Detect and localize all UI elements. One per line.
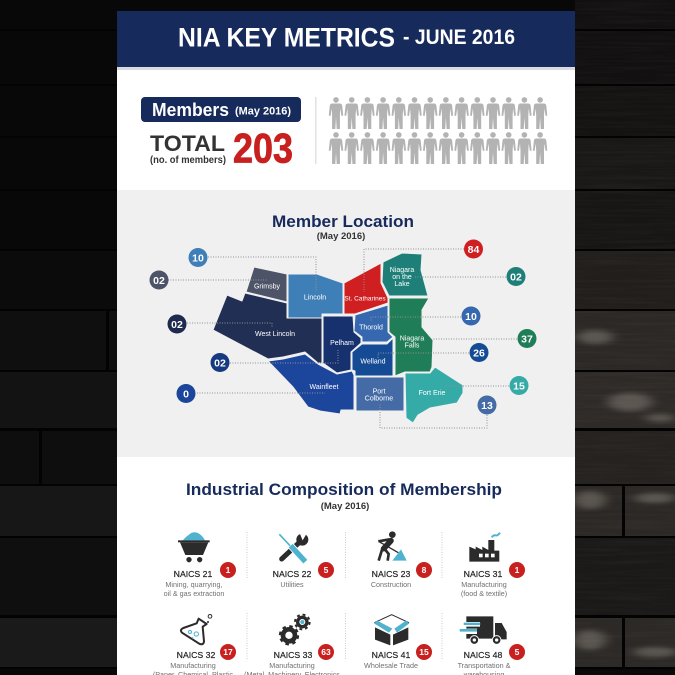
map labels: Niagara	[400, 336, 424, 342]
pictogram: people	[329, 97, 547, 164]
NAICS 31: NAICS 31	[464, 569, 502, 579]
NAICS 22: Utilities	[280, 580, 304, 589]
map labels: West Lincoln	[255, 331, 295, 338]
industry count badges: 5	[515, 647, 520, 657]
industry count badges	[220, 562, 525, 660]
NAICS 33: Manufacturing	[269, 661, 315, 670]
heading: member location: Member Location	[272, 212, 414, 231]
industry count badges: 15	[419, 647, 429, 657]
badge: Niagara Falls 37	[518, 329, 536, 348]
NAICS 21: NAICS 21	[174, 569, 212, 579]
heading: industrial composition: Industrial Composition of Membership	[186, 480, 502, 499]
badge: Grimsby 02	[150, 270, 168, 290]
badge: Pelham 02	[210, 353, 230, 372]
map labels: Pelham	[330, 340, 354, 347]
region: Welland	[352, 338, 393, 376]
map labels: Wainfleet	[310, 384, 339, 391]
map labels	[254, 267, 446, 402]
badge: Wainfleet 0: 0	[183, 388, 189, 400]
members pill	[141, 97, 301, 122]
total label: TOTAL	[150, 131, 225, 156]
industry count badges: 8	[422, 565, 427, 575]
region: West Lincoln	[213, 293, 322, 363]
industry count badges: 17	[223, 647, 233, 657]
industry count badges: 1	[226, 565, 231, 575]
region: Wainfleet	[268, 354, 354, 414]
region: Niagara on the Lake	[382, 253, 428, 296]
NAICS 48: NAICS 48	[464, 650, 502, 660]
panel: members total	[141, 97, 301, 172]
badge: Niagara on the Lake 02	[506, 267, 526, 286]
map: Niagara region	[213, 253, 463, 423]
badge: Pelham 02: 02	[214, 358, 226, 370]
badge: St. Catharines 84	[464, 240, 483, 258]
map labels: Welland	[360, 358, 386, 366]
NAICS 32: Manufacturing	[170, 661, 216, 670]
icon: flask	[181, 614, 212, 644]
map labels: Niagara	[390, 267, 414, 274]
badge: Fort Erie 15	[510, 376, 528, 395]
icon: mine cart	[178, 532, 210, 562]
region: Fort Erie	[405, 367, 463, 423]
heading: industrial composition: (May 2016)	[321, 501, 369, 512]
map labels: on the	[392, 274, 412, 281]
map value badges	[150, 240, 536, 414]
NAICS 41: NAICS 41	[372, 650, 410, 660]
title date: - JUNE 2016	[403, 26, 515, 49]
badge: Port Colborne 13	[478, 396, 496, 414]
industry count badges: 1	[515, 565, 520, 575]
badge: St. Catharines 84: 84	[468, 244, 479, 256]
NAICS 22: NAICS 22	[273, 569, 311, 579]
map labels: Lake	[394, 281, 410, 288]
NAICS 21: oil & gas extraction	[164, 589, 224, 598]
NAICS 31	[461, 569, 507, 598]
NAICS 23	[371, 569, 411, 589]
total label	[150, 131, 226, 166]
map labels: Colborne	[365, 396, 393, 402]
icon: construction worker	[378, 531, 407, 561]
icon: delivery truck	[460, 616, 507, 644]
badge: Welland 26	[470, 343, 488, 362]
total label: (no. of members)	[150, 155, 226, 166]
NAICS 41: Wholesale Trade	[364, 661, 418, 670]
heading: industrial composition	[186, 480, 502, 512]
badge: Lincoln 10	[188, 248, 208, 267]
NAICS 41	[364, 650, 418, 670]
region: Thorold	[354, 305, 393, 342]
badge: Fort Erie 15: 15	[513, 380, 525, 392]
badge: West Lincoln 02: 02	[171, 319, 183, 331]
region: Niagara Falls	[389, 298, 433, 376]
map labels: St. Catharines	[344, 296, 386, 302]
icon: factory	[469, 533, 500, 562]
NAICS 22	[273, 569, 311, 589]
members pill: Members	[152, 100, 229, 120]
NAICS 33: NAICS 33	[274, 650, 312, 660]
badge: West Lincoln 02	[168, 314, 186, 334]
map labels: Port	[373, 388, 385, 396]
industry labels	[153, 569, 511, 675]
leader lines	[168, 249, 517, 428]
panel: infographic sheet	[117, 11, 575, 675]
NAICS 31: (food & textile)	[461, 589, 507, 598]
badge: Niagara on the Lake 02: 02	[510, 272, 522, 284]
map labels: Grimsby	[254, 284, 281, 290]
header banner	[117, 11, 575, 70]
NAICS 48: Transportation &	[458, 661, 511, 670]
NAICS 21: Mining, quarrying,	[165, 580, 223, 589]
region: Lincoln	[288, 274, 343, 318]
NAICS 23: NAICS 23	[372, 569, 410, 579]
map labels: Lincoln	[304, 294, 326, 302]
badge: Lincoln 10: 10	[192, 252, 204, 264]
map labels: Thorold	[359, 324, 383, 332]
region: Grimsby	[246, 267, 287, 302]
heading: member location: (May 2016)	[317, 231, 365, 242]
NAICS 48	[458, 650, 511, 675]
badge: Grimsby 02: 02	[153, 275, 165, 287]
industry count badges: 63	[321, 647, 331, 657]
members pill: (May 2016)	[235, 106, 291, 118]
heading: member location	[272, 212, 414, 242]
icon: box	[374, 615, 409, 645]
map labels: Falls	[405, 342, 420, 350]
NAICS 32	[153, 650, 234, 675]
badge: Wainfleet 0	[176, 384, 196, 403]
NAICS 33	[244, 650, 340, 675]
badge: Thorold 10: 10	[465, 311, 477, 323]
total value: 203	[233, 124, 293, 172]
badge: Niagara Falls 37: 37	[521, 334, 533, 346]
title: NIA KEY METRICS	[178, 22, 395, 52]
region: Pelham	[323, 316, 361, 373]
badge: Port Colborne 13: 13	[481, 400, 493, 412]
region: St. Catharines	[344, 263, 388, 314]
icon: tools	[279, 532, 308, 562]
map labels: Fort Erie	[419, 390, 446, 397]
badge: Welland 26: 26	[473, 348, 485, 360]
icon: gears	[280, 615, 310, 644]
NAICS 31: Manufacturing	[461, 580, 507, 589]
industry count badges: 5	[324, 565, 329, 575]
badge: Thorold 10	[462, 306, 480, 326]
NAICS 21	[164, 569, 224, 598]
NAICS 32: NAICS 32	[177, 650, 215, 660]
NAICS 23: Construction	[371, 580, 411, 589]
region: Port Colborne	[356, 377, 404, 411]
